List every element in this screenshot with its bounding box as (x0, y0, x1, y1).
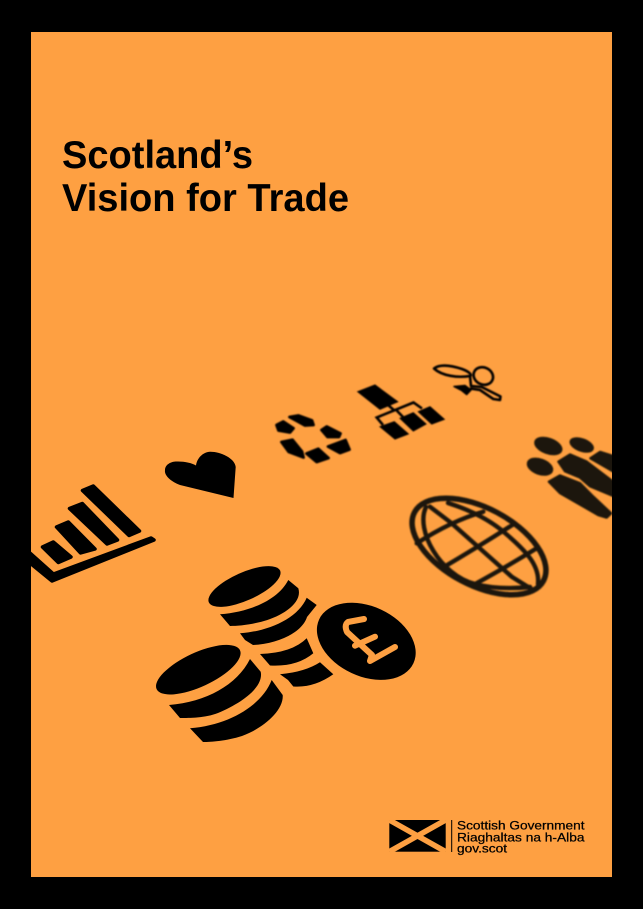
logo: Scottish Government (389, 818, 585, 856)
icon: organisation chart (358, 385, 444, 439)
icon: heart (165, 452, 236, 498)
icon: globe (396, 478, 562, 615)
icon: bar chart (30, 486, 154, 581)
logo wordmark: gov.scot (457, 842, 508, 856)
lower coin stack (149, 635, 283, 742)
icon: plant (434, 364, 500, 400)
title: Scotland’s (62, 134, 253, 177)
logo divider (451, 820, 452, 852)
icon: coins with pound (149, 558, 428, 742)
upper coin stack (203, 558, 333, 687)
pound coin (304, 588, 428, 695)
logo wordmark: Riaghaltas na h-Alba (457, 830, 585, 844)
title (62, 134, 349, 220)
icon: group of people (526, 435, 616, 518)
saltire flag (389, 820, 446, 852)
logo wordmark (457, 818, 585, 856)
logo wordmark: Scottish Government (457, 818, 585, 832)
title: Vision for Trade (62, 177, 349, 220)
icon: recycling symbol (276, 416, 350, 462)
